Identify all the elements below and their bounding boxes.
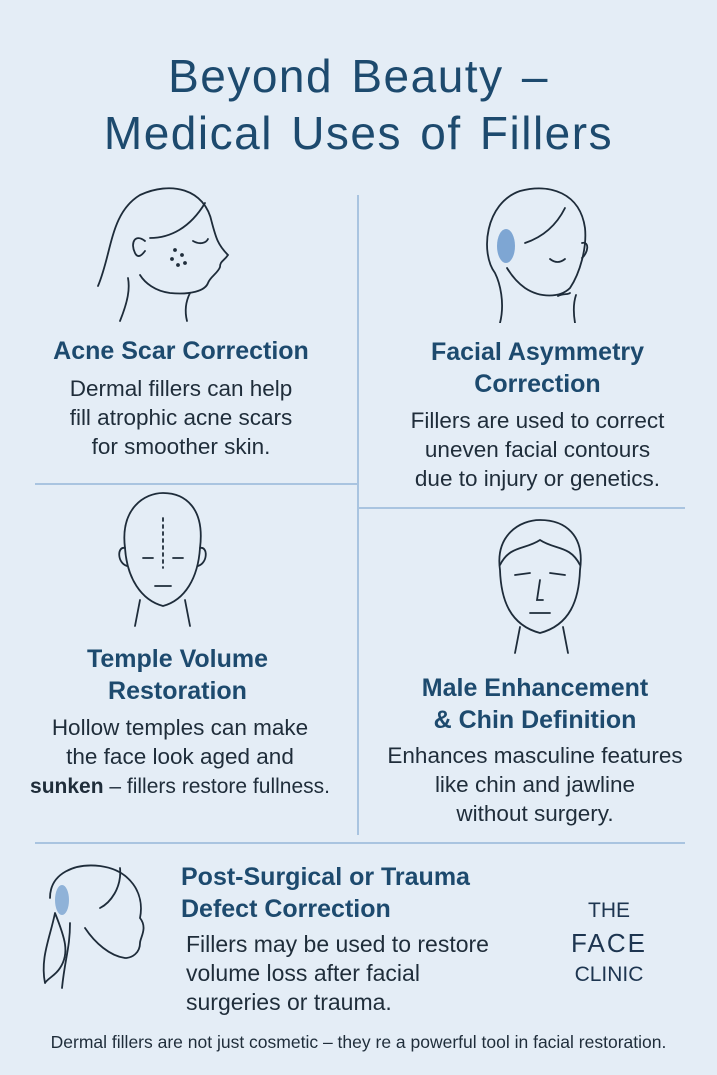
title <box>104 50 613 159</box>
title: Medical Uses of Fillers <box>104 107 613 159</box>
heading: post-surgical: Post-Surgical or Trauma <box>181 863 470 891</box>
text: asymmetry <box>411 408 664 491</box>
text: post-surgical: surgeries or trauma. <box>186 989 392 1015</box>
heading: male: & Chin Definition <box>434 706 636 734</box>
icon: acne profile <box>97 187 230 322</box>
logo: CLINIC <box>575 963 643 986</box>
text: temple: Hollow temples can make <box>52 715 308 740</box>
icon: male face <box>498 519 582 654</box>
footer: Dermal fillers are not just cosmetic – they re a powerful tool in facial restoration. <box>51 1032 666 1052</box>
heading: temple: Temple Volume <box>87 645 268 673</box>
text: male: without surgery. <box>456 801 614 826</box>
logo: FACE <box>571 928 647 958</box>
text: asymmetry: Fillers are used to correct <box>411 408 664 433</box>
text: acne: fill atrophic acne scars <box>70 405 292 430</box>
text: temple: sunken – fillers restore fullness. <box>30 775 330 798</box>
text: male: like chin and jawline <box>435 772 635 797</box>
text: asymmetry: uneven facial contours <box>425 437 650 462</box>
logo: THE <box>588 899 630 922</box>
icon: post-surgical profile <box>42 864 144 989</box>
text: temple <box>30 715 330 798</box>
icon: asymmetry head <box>486 188 588 323</box>
heading: post-surgical <box>181 863 470 923</box>
heading: asymmetry: Correction <box>474 370 601 398</box>
text: acne <box>70 376 292 459</box>
heading: male <box>422 674 648 734</box>
text: asymmetry: due to injury or genetics. <box>415 466 660 491</box>
title: Beyond Beauty – <box>168 50 549 102</box>
text: post-surgical: volume loss after facial <box>186 960 420 986</box>
text: acne: Dermal fillers can help <box>70 376 292 401</box>
heading: asymmetry <box>431 338 644 398</box>
icon: temple face <box>118 492 207 627</box>
heading: temple <box>87 645 268 705</box>
text: post-surgical: Fillers may be used to restore <box>186 931 489 957</box>
heading: acne: Acne Scar Correction <box>53 337 309 365</box>
text: post-surgical <box>186 931 489 1015</box>
heading: temple: Restoration <box>108 677 247 705</box>
heading: male: Male Enhancement <box>422 674 648 702</box>
heading: asymmetry: Facial Asymmetry <box>431 338 644 366</box>
text: temple: the face look aged and <box>66 744 294 769</box>
text: male: Enhances masculine features <box>387 743 683 768</box>
heading: post-surgical: Defect Correction <box>181 895 391 923</box>
text: acne: for smoother skin. <box>92 434 270 459</box>
logo <box>571 899 647 986</box>
text: male <box>387 743 683 826</box>
